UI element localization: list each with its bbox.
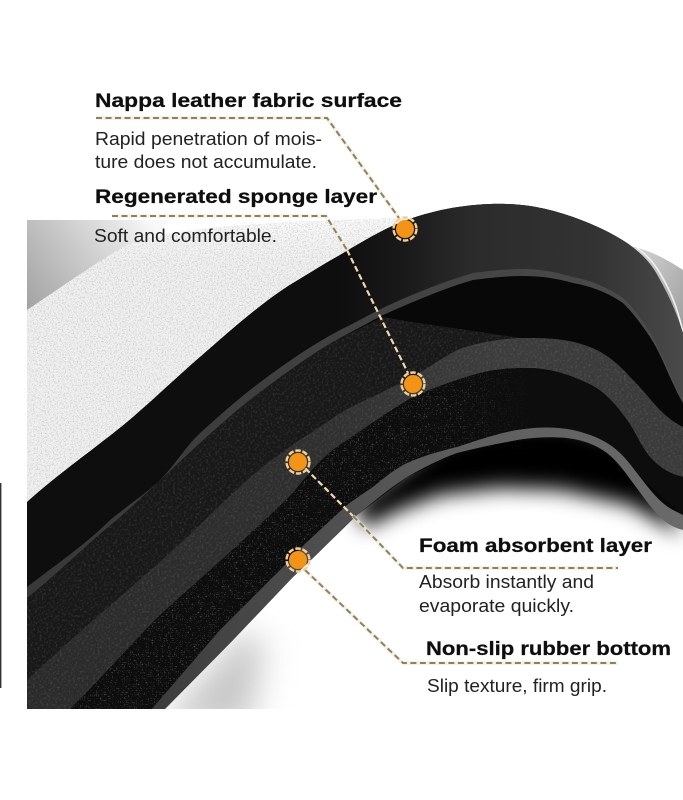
description: foam layer: evaporate quickly. xyxy=(419,595,574,616)
photo of layered insole xyxy=(27,204,683,725)
marker dot: nappa surface xyxy=(394,218,416,240)
black silhouette of the insole xyxy=(27,204,683,711)
light shadow lower left xyxy=(160,630,265,725)
description: regenerated sponge: Soft and comfortable. xyxy=(94,225,277,246)
marker dot: rubber bottom xyxy=(286,548,310,572)
infographic canvas xyxy=(0,92,683,709)
marker dot: foam layer xyxy=(286,450,310,474)
white highlight edge at right xyxy=(637,248,683,332)
background grey upper left xyxy=(27,220,156,310)
background grey upper right xyxy=(632,246,683,332)
foam layer dark textured band xyxy=(27,310,537,685)
heading: regenerated sponge: Regenerated sponge layer xyxy=(95,187,378,208)
marker dot: sponge layer xyxy=(402,372,424,396)
left edge dark line xyxy=(0,483,1,688)
description: nappa leather: Rapid penetration of mois- xyxy=(95,128,322,149)
leader line: sponge layer xyxy=(112,216,408,373)
leader line: rubber bottom xyxy=(305,570,618,663)
shadow under the arch xyxy=(355,420,680,535)
foam layer grey band xyxy=(27,335,683,710)
description: rubber bottom: Slip texture, firm grip. xyxy=(427,675,607,696)
heading: rubber bottom: Non-slip rubber bottom xyxy=(426,639,671,660)
description: nappa leather: ture does not accumulate. xyxy=(95,151,317,172)
leader line: foam layer xyxy=(299,462,618,568)
black band left of top layer xyxy=(27,255,340,587)
heading: foam layer: Foam absorbent layer xyxy=(419,536,653,557)
leader line: nappa surface xyxy=(96,118,399,218)
textured leather black band xyxy=(70,365,683,711)
grey stripe below black layer xyxy=(27,204,683,598)
description: foam layer: Absorb instantly and xyxy=(419,571,594,592)
nappa fabric surface white layer xyxy=(27,216,412,507)
sponge top layer body xyxy=(340,204,683,342)
heading: nappa leather: Nappa leather fabric surface xyxy=(95,91,402,112)
non-slip rubber bottom grey strip xyxy=(150,428,683,711)
